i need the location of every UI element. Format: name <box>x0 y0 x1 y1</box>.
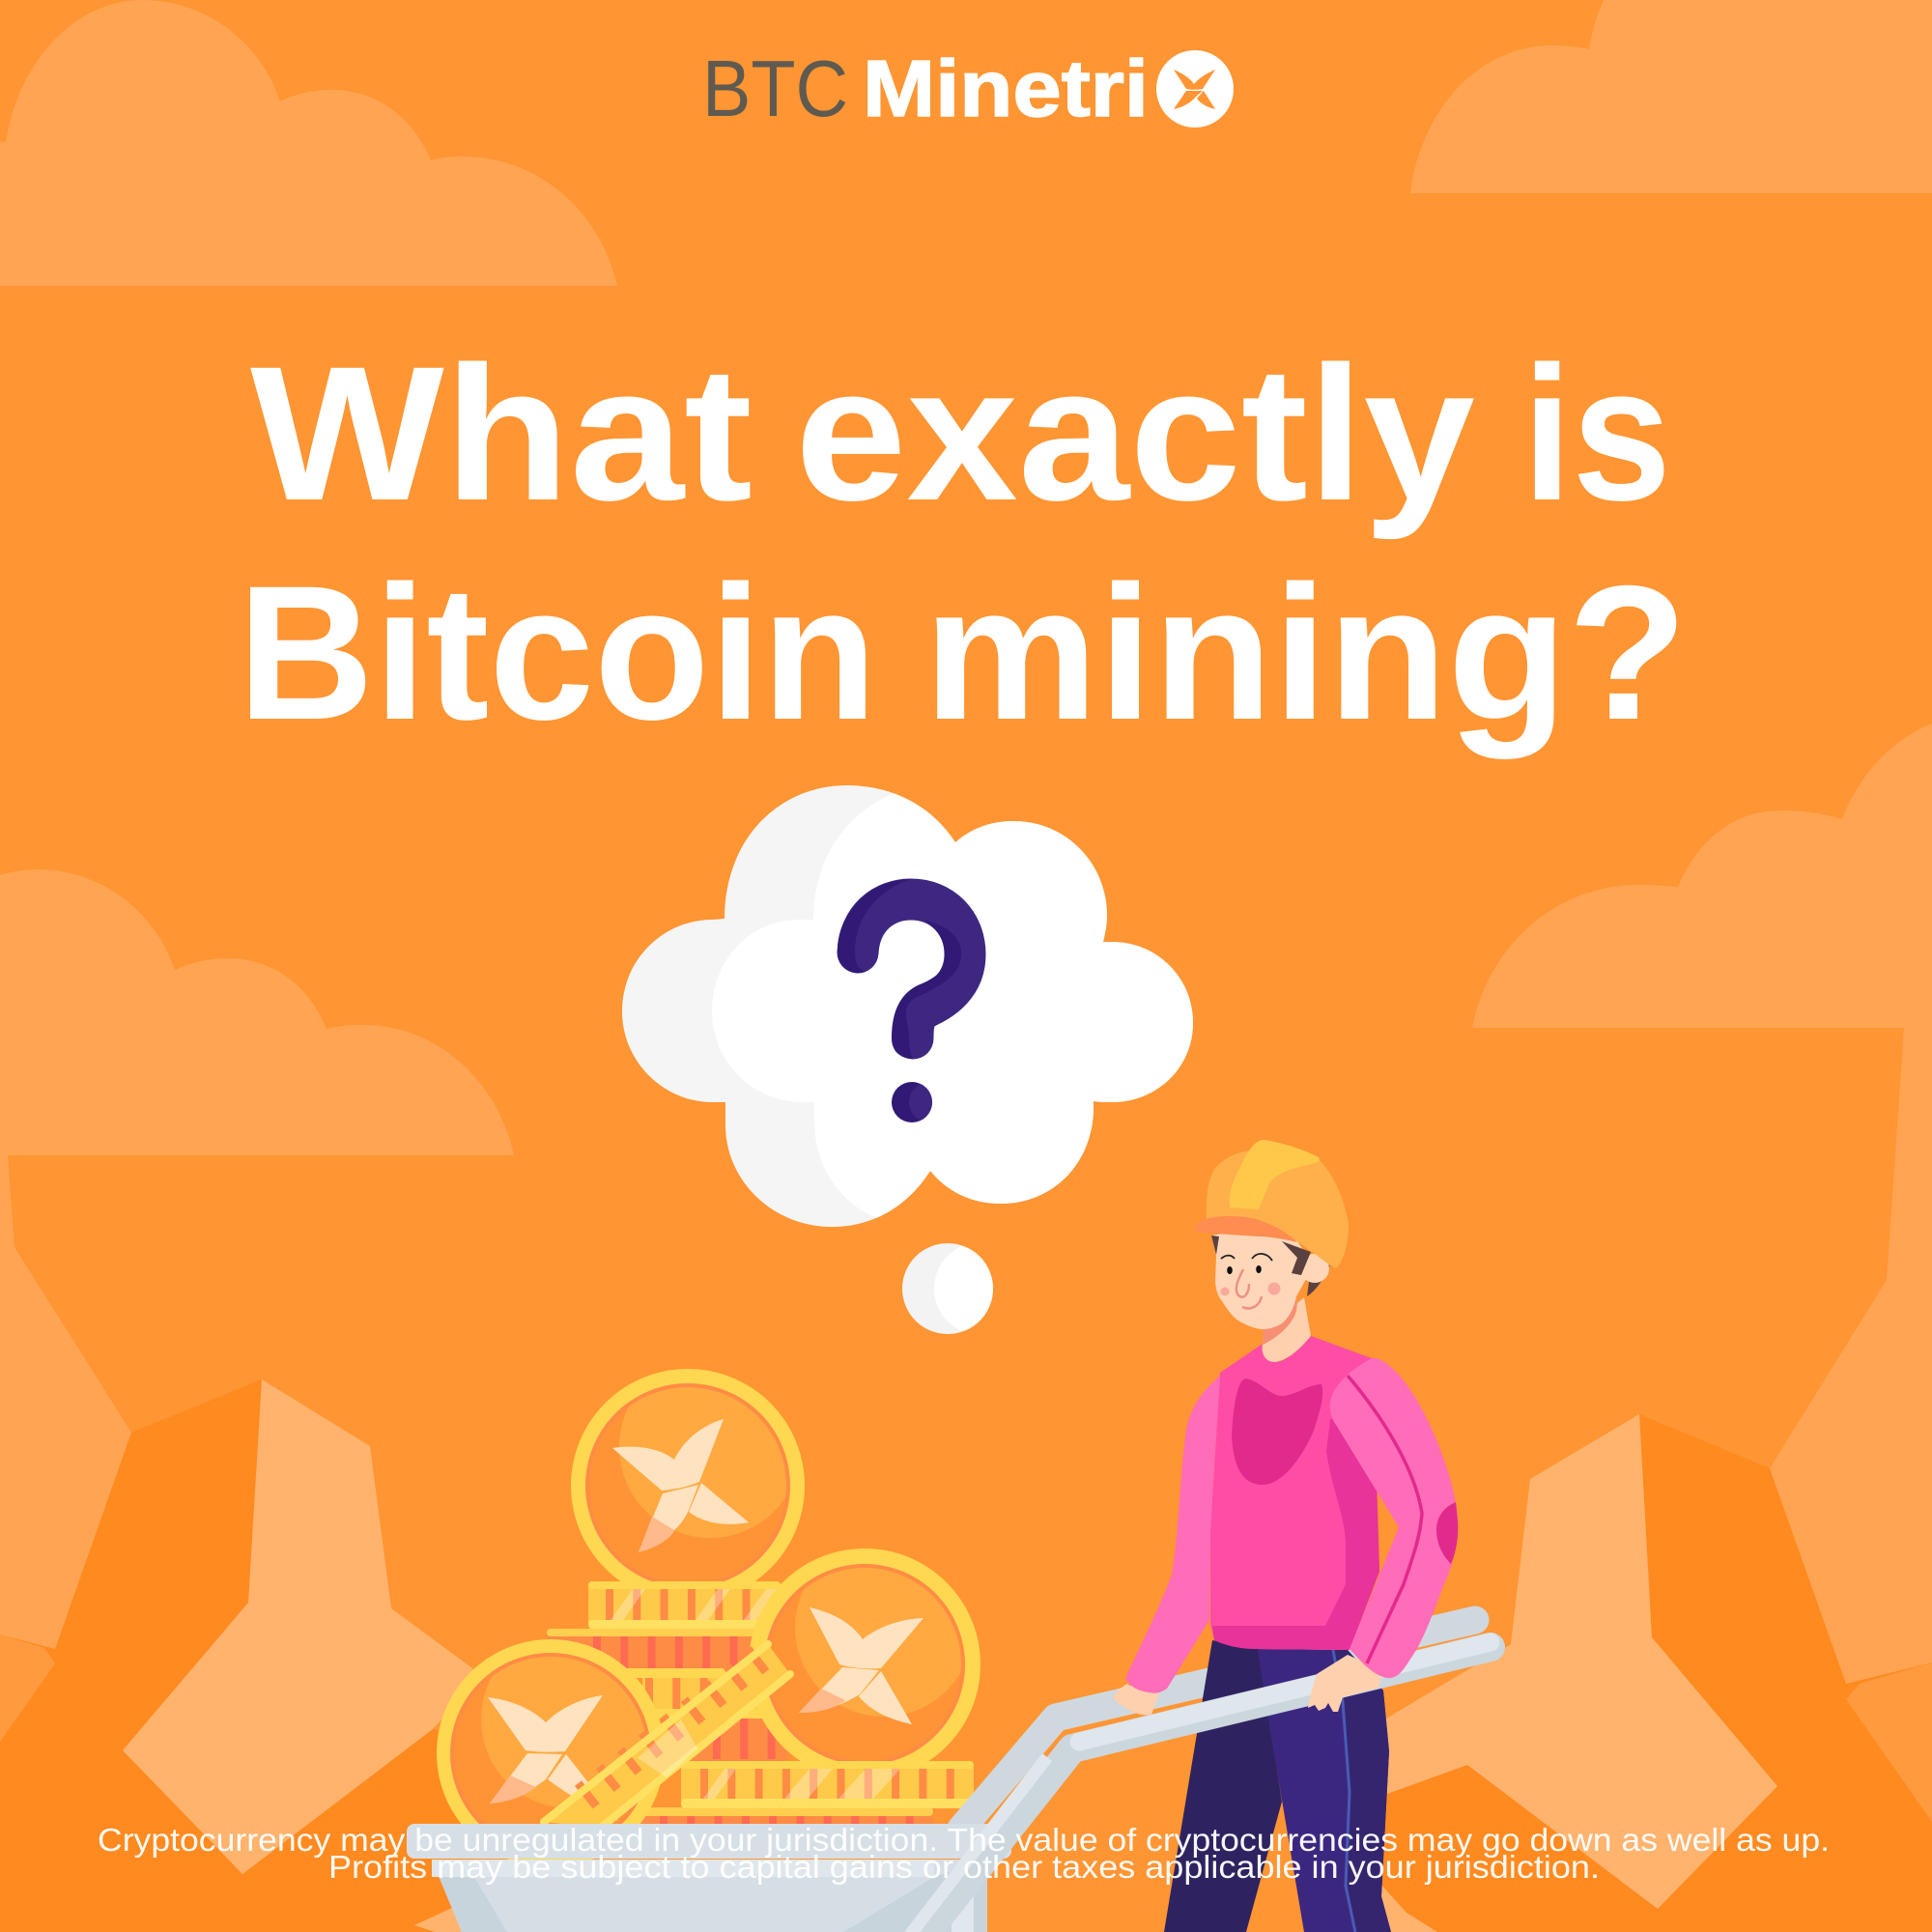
handle: front <box>910 1642 1491 1932</box>
coin: top <box>571 1369 805 1581</box>
hard hat <box>1193 1140 1349 1268</box>
coin stack: lower orange <box>667 1719 787 1761</box>
back leg <box>1164 1640 1282 1932</box>
logo text: BTC: BTC <box>702 43 848 133</box>
coin stack: middle yellow <box>642 1678 763 1719</box>
coin stack: upper yellow <box>588 1581 781 1629</box>
right hand <box>1308 1655 1381 1712</box>
tray rim <box>407 1824 1011 1859</box>
coin stack: orange <box>547 1629 759 1678</box>
title <box>238 327 1688 759</box>
coin: left <box>437 1631 665 1867</box>
cloud: middle left <box>0 869 514 1155</box>
elbow patch <box>1436 1502 1458 1564</box>
mountains: dark right <box>1333 1414 1932 1932</box>
coin: right <box>750 1548 980 1761</box>
logo badge <box>1156 50 1234 128</box>
disclaimer: Cryptocurrency may be unregulated in your jurisdiction. The value of cryptocurrencies may go down as well as up. <box>98 1822 1830 1858</box>
trouser seam <box>1333 1650 1355 1932</box>
logo <box>702 43 1234 133</box>
peak: right <box>1352 1414 1777 1909</box>
cloud: middle right <box>1472 724 1932 1028</box>
ear <box>1300 1254 1329 1283</box>
handle: rear <box>961 1620 1475 1829</box>
peak: left <box>123 1379 483 1874</box>
title: mining? <box>923 546 1688 759</box>
cloud: top left <box>0 0 617 286</box>
title: What <box>250 327 753 540</box>
tray body <box>432 1860 987 1932</box>
peak: small bottom pieces <box>414 1874 1437 1932</box>
tray panel <box>952 1890 974 1932</box>
rock: left <box>0 1155 131 1649</box>
rock: lower right <box>1846 1662 1932 1822</box>
cloud: top right <box>1410 0 1932 193</box>
face <box>1211 1227 1314 1329</box>
back hair <box>1307 1261 1330 1296</box>
tray right face <box>843 1860 987 1932</box>
tray left face <box>432 1860 507 1932</box>
tilted coin edge <box>544 1644 790 1828</box>
thought bubble small <box>902 1243 993 1334</box>
wheelbarrow <box>407 1620 1475 1932</box>
hair <box>1211 1236 1311 1275</box>
worker <box>910 1140 1491 1932</box>
torso <box>1210 1336 1379 1650</box>
left hand <box>1113 1684 1159 1715</box>
title: is <box>1522 327 1671 540</box>
left sleeve <box>1125 1376 1220 1693</box>
title: exactly <box>795 327 1475 540</box>
chest patch <box>1232 1378 1322 1485</box>
right sleeve <box>1330 1358 1458 1678</box>
coin stack: front yellow <box>681 1761 974 1808</box>
rock: right <box>1770 1028 1932 1684</box>
logo text: Minetri: Minetri <box>863 43 1149 133</box>
disclaimer: Profits may be subject to capital gains or other taxes applicable in your jurisdiction. <box>328 1849 1600 1885</box>
neck <box>1262 1297 1311 1362</box>
thought cloud <box>622 785 1193 1227</box>
rock: lower left <box>0 1634 55 1742</box>
torso shade <box>1212 1391 1379 1650</box>
tray inner band <box>432 1860 934 1877</box>
coin stack: bottom orange <box>641 1807 933 1832</box>
title: Bitcoin <box>238 546 877 759</box>
sleeve stripe <box>1348 1376 1422 1663</box>
disclaimer <box>98 1822 1830 1885</box>
neck shadow <box>1263 1296 1297 1345</box>
front leg shade <box>1333 1650 1391 1932</box>
mountains: dark left <box>0 1379 473 1932</box>
front leg <box>1258 1649 1391 1932</box>
facial features <box>1221 1254 1281 1308</box>
icon: question mark <box>838 879 965 1122</box>
